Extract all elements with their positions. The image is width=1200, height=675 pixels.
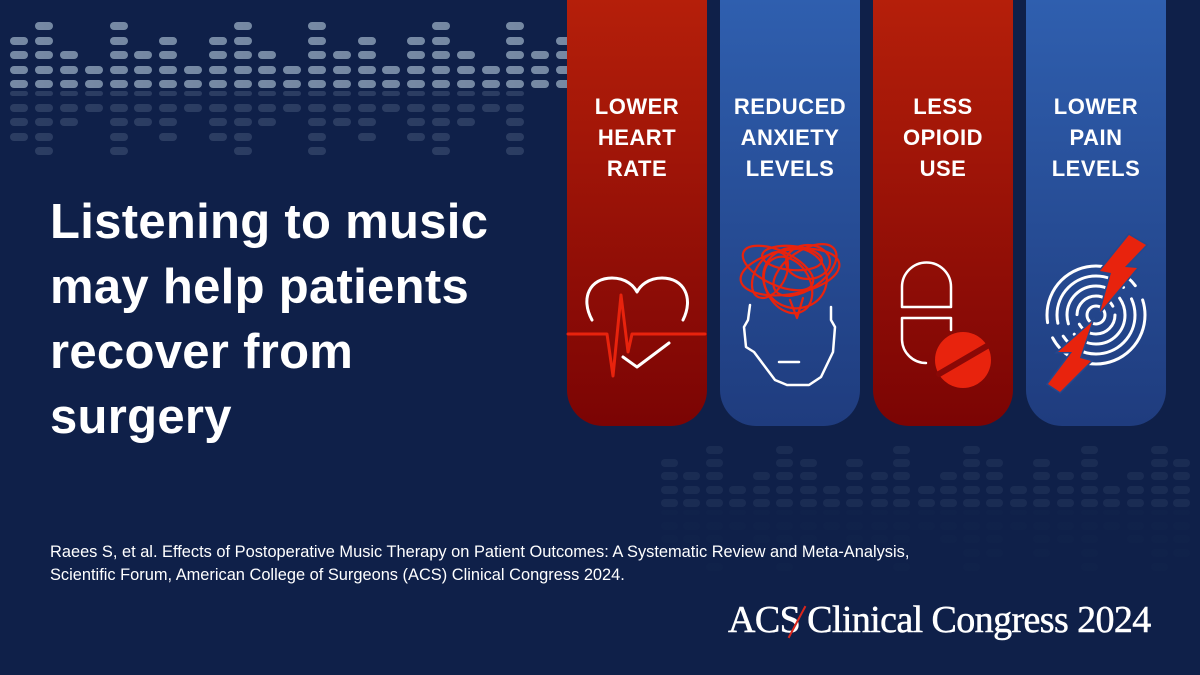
equalizer top-left [10,22,574,155]
title [50,195,488,444]
label: reduced anxiety levels: LEVELS [746,156,834,181]
citation [50,543,909,584]
title: recover from [50,325,353,379]
icon: heart with ecg [568,278,705,376]
equalizer bottom-right [661,446,1190,571]
label: lower heart rate: LOWER [595,94,679,119]
icon: head with tangled thoughts [736,234,845,385]
label: less opioid use: USE [920,156,966,181]
title: may help patients [50,260,469,314]
title: Listening to music [50,195,488,249]
icon: capsule and tablet [902,262,991,388]
icon: pain rings with lightning [1047,235,1146,392]
label: lower pain levels: LEVELS [1052,156,1140,181]
panel: less opioid use [873,0,1013,426]
label: less opioid use: LESS [913,94,973,119]
citation: Scientific Forum, American College of Surgeons (ACS) Clinical Congress 2024. [50,566,625,584]
title: surgery [50,390,232,444]
label: lower pain levels: LOWER [1054,94,1138,119]
citation: Raees S, et al. Effects of Postoperative Music Therapy on Patient Outcomes: A Systematic Review and Meta-Analysis, [50,543,909,561]
label: less opioid use: OPIOID [903,125,983,150]
label: lower heart rate: HEART [598,125,676,150]
label: lower heart rate: RATE [607,156,667,181]
panel: lower heart rate [567,0,707,426]
label: reduced anxiety levels: ANXIETY [741,125,839,150]
panel: lower pain levels [1026,0,1166,426]
panel: reduced anxiety levels [720,0,860,426]
logo: ACS Clinical Congress 2024: ACSClinical Congress 2024 [728,599,1151,641]
label: reduced anxiety levels: REDUCED [734,94,846,119]
label: lower pain levels: PAIN [1070,125,1122,150]
